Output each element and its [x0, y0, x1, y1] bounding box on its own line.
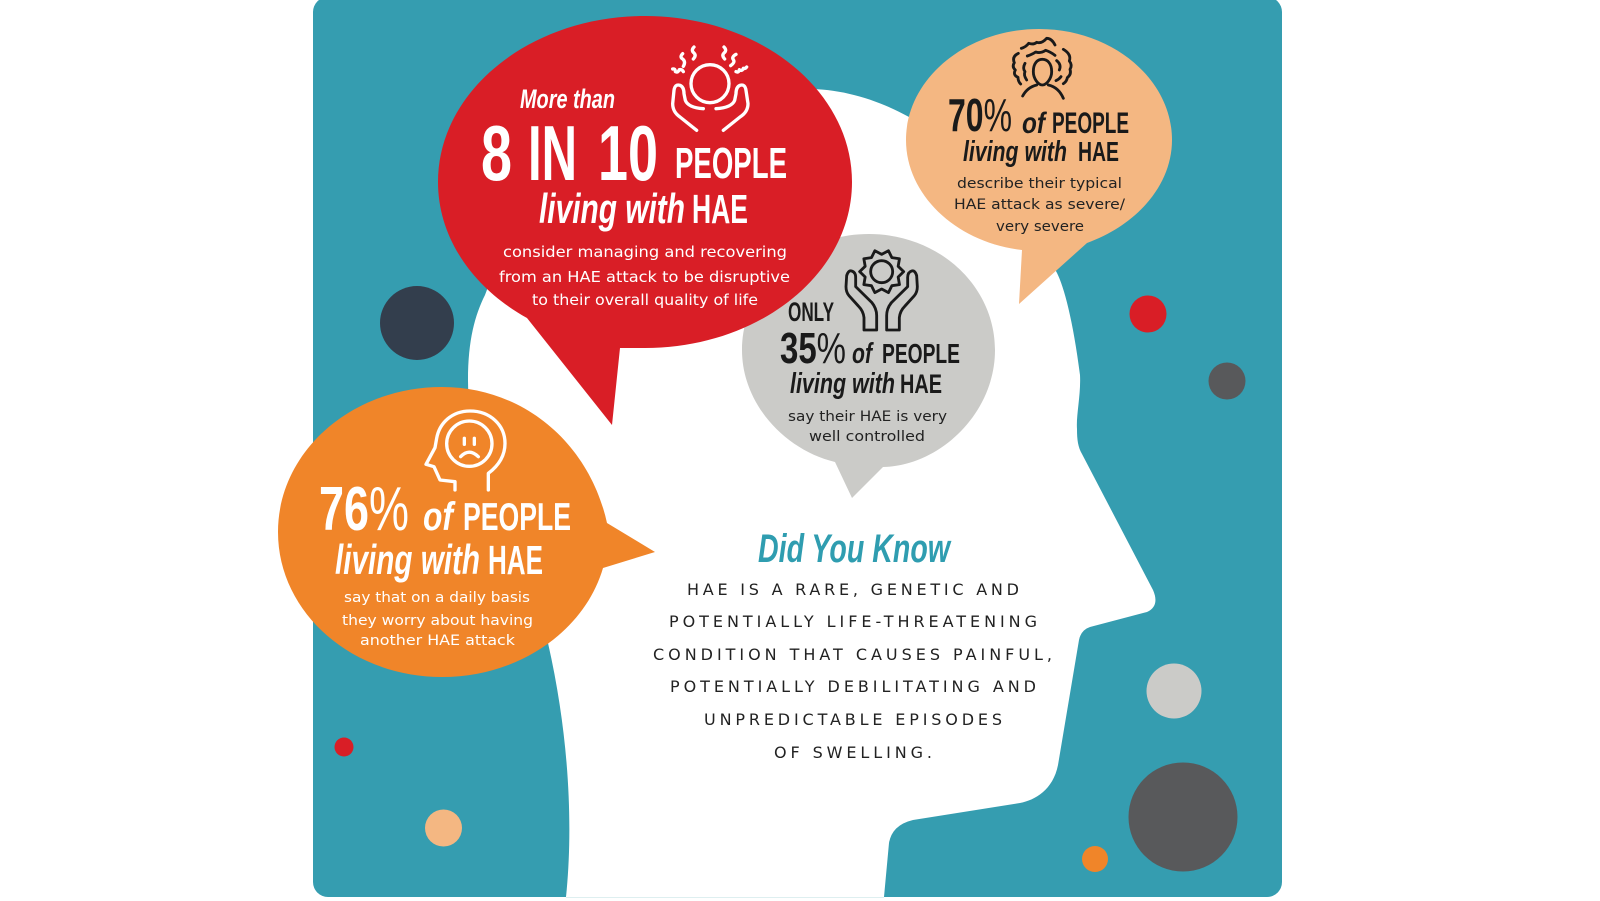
heading: more than 8 in 10 people: PEOPLE: [675, 139, 787, 188]
bubble shape: [906, 29, 1172, 304]
heading: only 35% of people: PEOPLE: [882, 338, 960, 369]
icon: person with curly hair: [1013, 38, 1071, 98]
dot: light gray: [1146, 664, 1202, 718]
body text: very severe: [996, 219, 1084, 235]
panel: teal background: [313, 0, 1282, 897]
dot: red upper right: [1130, 296, 1166, 332]
text block: HAE description: [653, 580, 1052, 762]
text block: HAE description: POTENTIALLY DEBILITATING AND: [670, 677, 1036, 696]
heading: 76% of people: 76%: [319, 475, 409, 544]
icon: head with sad face: [426, 411, 505, 490]
heading: only 35% of people: of: [852, 338, 874, 370]
heading: did you know: Did You Know: [758, 527, 952, 571]
heading: only 35% of people: [780, 297, 960, 400]
heading: 76% of people: HAE: [488, 537, 543, 583]
panel: peach speech bubble, 70%: [906, 29, 1172, 304]
icon: hands holding gear: [846, 251, 917, 330]
text block: HAE description: CONDITION THAT CAUSES PAINFUL,: [653, 645, 1052, 664]
body text: say their HAE is very: [788, 409, 947, 425]
body text: from an HAE attack to be disruptive: [499, 268, 790, 286]
heading: 70% of people: PEOPLE: [1052, 107, 1129, 140]
bubble shape: [278, 387, 655, 677]
heading: 76% of people: living with: [335, 536, 480, 583]
body text: [499, 243, 790, 309]
heading: only 35% of people: ONLY: [788, 297, 834, 327]
bubble shape: [438, 16, 852, 425]
heading: 70% of people: living with: [963, 136, 1067, 168]
heading: more than 8 in 10 people: [481, 84, 787, 232]
heading: more than 8 in 10 people: living with: [539, 185, 685, 232]
heading: 70% of people: of: [1022, 107, 1047, 140]
heading: only 35% of people: 35%: [780, 324, 846, 373]
heading: more than 8 in 10 people: More than: [520, 84, 615, 114]
heading: more than 8 in 10 people: HAE: [692, 186, 748, 232]
dot: orange: [1082, 846, 1108, 872]
dot: peach: [425, 810, 462, 846]
body text: HAE attack as severe/: [954, 197, 1125, 213]
heading: 70% of people: 70%: [948, 89, 1012, 141]
panel: orange speech bubble, 76%: [278, 387, 655, 677]
heading: 76% of people: PEOPLE: [463, 496, 571, 539]
heading: more than 8 in 10 people: 8: [481, 109, 512, 197]
text block: HAE description: UNPREDICTABLE EPISODES: [704, 710, 1002, 729]
body text: they worry about having: [342, 613, 533, 629]
heading: more than 8 in 10 people: IN: [528, 109, 577, 197]
body text: [954, 176, 1125, 235]
heading: 76% of people: of: [423, 495, 456, 539]
decorative dots: [334, 286, 1246, 872]
heading: 76% of people: [319, 475, 571, 583]
bubble shape: [742, 234, 995, 498]
body text: say that on a daily basis: [344, 590, 530, 606]
heading: 70% of people: HAE: [1078, 136, 1119, 167]
text block: HAE description: HAE IS A RARE, GENETIC AND: [687, 580, 1019, 599]
body text: consider managing and recovering: [503, 243, 787, 261]
text block: HAE description: OF SWELLING.: [774, 743, 932, 762]
body text: to their overall quality of life: [532, 291, 758, 309]
icon: hands around head with stress marks: [673, 47, 748, 130]
panel: gray speech bubble, 35%: [742, 234, 995, 498]
heading: only 35% of people: living with: [790, 368, 895, 400]
head silhouette: [468, 89, 1155, 897]
heading: more than 8 in 10 people: 10: [598, 109, 658, 197]
body text: [788, 409, 947, 445]
dot: red lower left: [334, 738, 354, 756]
heading: only 35% of people: HAE: [900, 369, 942, 399]
body text: well controlled: [809, 429, 925, 445]
text block: HAE description: POTENTIALLY LIFE-THREATENING: [669, 612, 1037, 631]
dot: gray upper right: [1208, 362, 1246, 400]
heading: 70% of people: [948, 89, 1129, 168]
body text: [342, 590, 533, 649]
dot: large dark gray: [1128, 762, 1238, 872]
body text: describe their typical: [957, 176, 1122, 192]
dot: navy: [380, 286, 454, 360]
body text: another HAE attack: [360, 633, 516, 649]
panel: red speech bubble, 8 in 10: [438, 16, 852, 425]
